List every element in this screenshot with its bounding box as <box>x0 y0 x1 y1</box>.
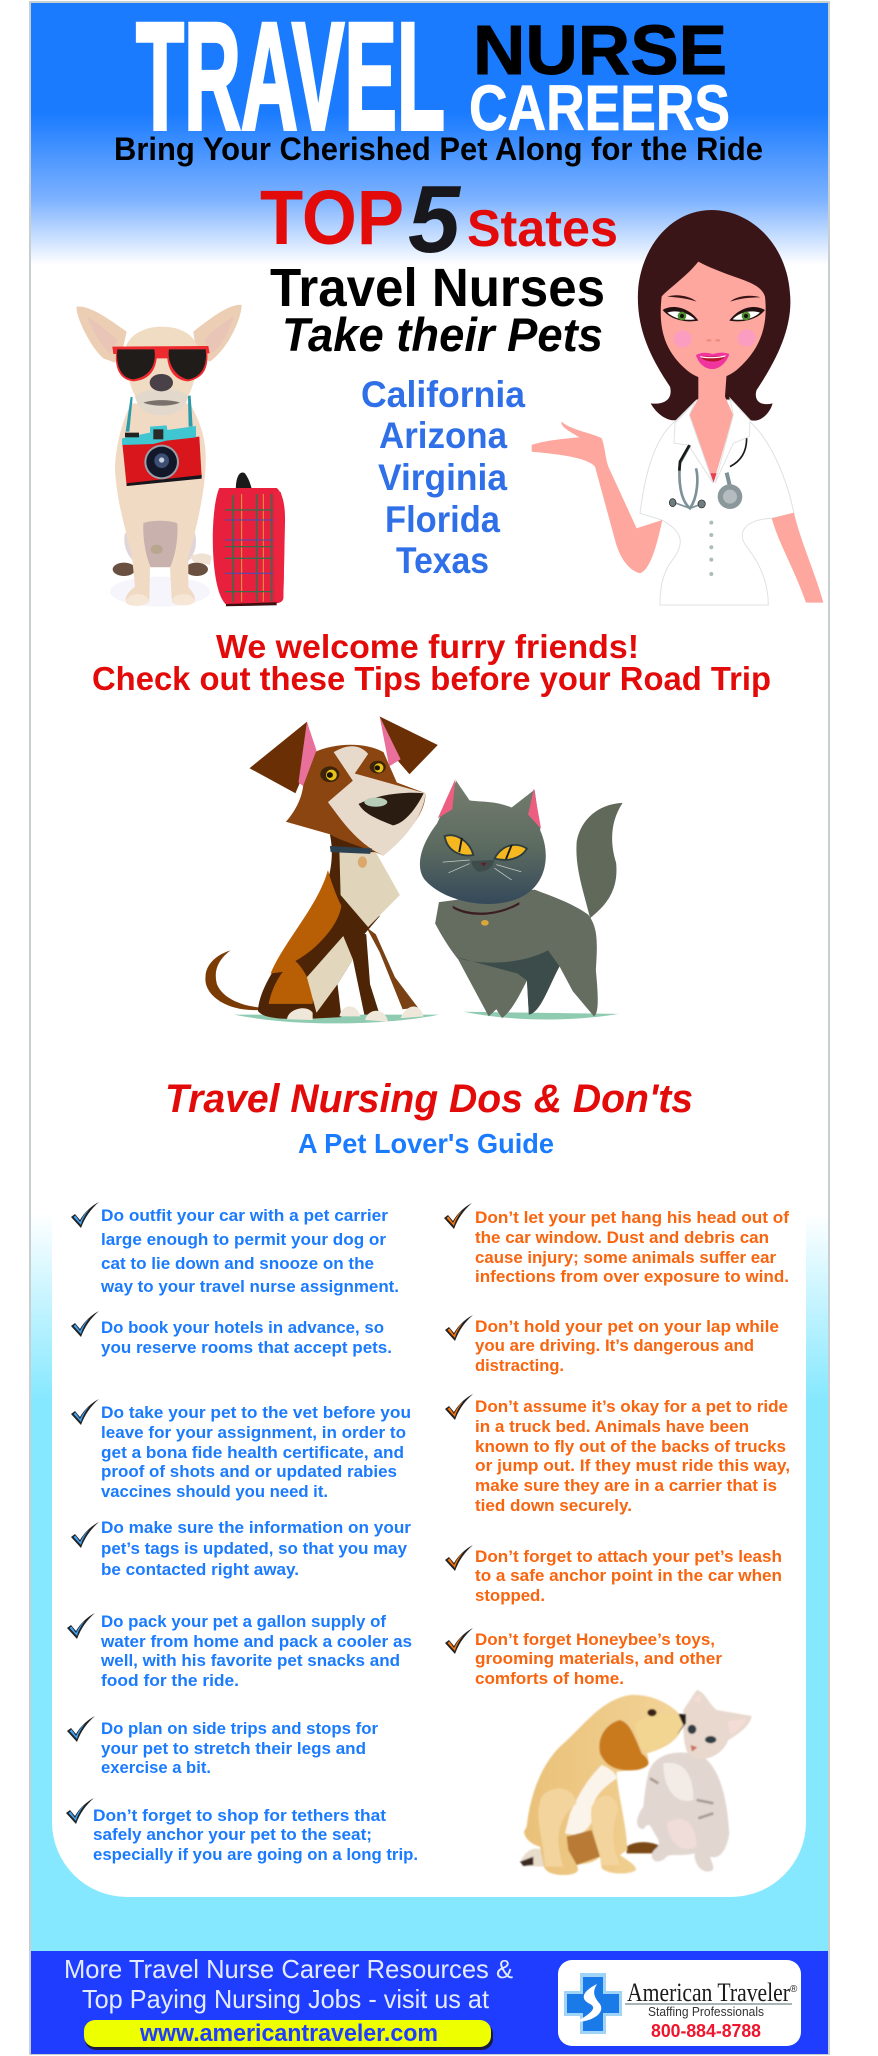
state: Florida: Florida <box>385 499 500 540</box>
illustration: chihuahua with sunglasses and camera <box>77 305 242 607</box>
don't tip 4: Don’t forget to attach your pet’s leash <box>475 1547 782 1566</box>
heading: top 5 states <box>260 166 618 273</box>
don't tip 3: Don’t assume it’s okay for a pet to ride <box>475 1397 788 1416</box>
don't tip 2: distracting. <box>475 1356 564 1375</box>
check icon <box>445 1315 473 1341</box>
do tip 6 <box>67 1716 378 1777</box>
column: don'ts <box>444 1203 790 1688</box>
don't tip 3 <box>445 1394 790 1515</box>
do tip 4: be contacted right away. <box>101 1560 299 1579</box>
don't tip 1: Don’t let your pet hang his head out of <box>475 1208 789 1227</box>
do tip 5: food for the ride. <box>101 1671 239 1690</box>
don't tip 5: grooming materials, and other <box>475 1649 722 1668</box>
don't tip 5 <box>445 1628 722 1688</box>
don't tip 5: comforts of home. <box>475 1669 624 1688</box>
don't tip 1: infections from over exposure to wind. <box>475 1267 789 1286</box>
logo tagline: Staffing Professionals <box>648 2004 764 2019</box>
do tip 1: way to your travel nurse assignment. <box>100 1277 399 1296</box>
nurse face <box>661 262 766 379</box>
don't tip 3: tied down securely. <box>475 1496 632 1515</box>
do tip 6: exercise a bit. <box>101 1758 211 1777</box>
do tip 2 <box>71 1311 392 1357</box>
don't tip 2: you are driving. It’s dangerous and <box>475 1336 754 1355</box>
nurse coat <box>640 400 794 605</box>
don't tip 1 <box>444 1203 789 1286</box>
check icon <box>71 1399 99 1425</box>
illustration: cartoon nurse <box>532 210 823 605</box>
website button <box>84 2020 493 2050</box>
check icon <box>67 1613 95 1639</box>
do tip 1: large enough to permit your dog or <box>101 1230 386 1249</box>
logo company name: American Traveler <box>627 1978 790 2007</box>
don't tip 2: Don’t hold your pet on your lap while <box>475 1317 779 1336</box>
do tip 4 <box>71 1518 411 1579</box>
word: TOP: TOP <box>260 175 404 261</box>
numeral: 5: 5 <box>408 166 462 273</box>
word: States: States <box>467 200 618 258</box>
column: dos <box>66 1202 418 1864</box>
do tip 3: get a bona fide health certificate, and <box>101 1443 404 1462</box>
nurse right arm <box>772 513 823 603</box>
do tip 5 <box>67 1612 412 1690</box>
section subheading: A Pet Lover's Guide <box>298 1128 554 1159</box>
don't tip 1: cause injury; some animals suffer ear <box>475 1248 776 1267</box>
check icon <box>67 1716 95 1742</box>
do tip 6: Do plan on side trips and stops for <box>101 1719 378 1738</box>
state: California: California <box>361 374 525 415</box>
don't tip 4: stopped. <box>475 1586 545 1605</box>
check icon <box>445 1394 473 1420</box>
don't tip 4 <box>445 1545 782 1605</box>
do tip 5: Do pack your pet a gallon supply of <box>101 1612 386 1631</box>
website button: www.americantraveler.com <box>139 2020 438 2047</box>
check icon <box>445 1628 473 1654</box>
don't tip 4: to a safe anchor point in the car when <box>475 1566 782 1585</box>
check icon <box>444 1203 472 1229</box>
footer bar <box>31 1951 828 2054</box>
do tip 7 <box>66 1798 418 1864</box>
nurse hair <box>638 210 790 421</box>
check icon <box>71 1202 99 1228</box>
do tip 5: water from home and pack a cooler as <box>100 1632 412 1651</box>
do tip 3: Do take your pet to the vet before you <box>101 1403 411 1422</box>
don't tip 3: in a truck bed. Animals have been <box>475 1417 749 1436</box>
check icon <box>66 1798 94 1824</box>
front leg far <box>366 927 418 1009</box>
stethoscope <box>669 438 747 509</box>
do tip 3: proof of shots and or updated rabies <box>101 1462 397 1481</box>
do tip 4: pet’s tags is updated, so that you may <box>101 1539 408 1558</box>
do tip 3: vaccines should you need it. <box>101 1482 328 1501</box>
check icon <box>71 1522 99 1548</box>
title <box>136 0 730 162</box>
list of five states <box>361 374 525 581</box>
do tip 7: safely anchor your pet to the seat; <box>93 1825 372 1844</box>
registered mark: ® <box>790 1984 798 1995</box>
do tip 1: cat to lie down and snooze on the <box>101 1254 374 1273</box>
do tip 2: you reserve rooms that accept pets. <box>101 1338 392 1357</box>
don't tip 3: make sure they are in a carrier that is <box>475 1476 777 1495</box>
don't tip 3: known to fly out of the backs of trucks <box>475 1437 786 1456</box>
title word: NURSE: NURSE <box>473 11 727 89</box>
nurse neck <box>689 373 733 483</box>
state: Texas: Texas <box>396 540 489 581</box>
don't tip 2 <box>445 1315 779 1375</box>
do tip 1 <box>71 1202 399 1296</box>
logo phone number: 800-884-8788 <box>651 2021 761 2041</box>
footer line one: More Travel Nurse Career Resources & <box>64 1954 513 1984</box>
state: Arizona: Arizona <box>379 415 507 456</box>
don't tip 5: Don’t forget Honeybee’s toys, <box>475 1630 715 1649</box>
photo: puppy kissing kitten <box>520 1690 752 1875</box>
do tip 6: your pet to stretch their legs and <box>101 1739 366 1758</box>
nurse collar <box>674 398 750 483</box>
do tip 4: Do make sure the information on your <box>101 1518 411 1537</box>
tagline line two: Check out these Tips before your Road Trip <box>92 660 771 697</box>
section heading: Travel Nursing Dos & Don'ts <box>165 1077 693 1121</box>
do tip 7: Don’t forget to shop for tethers that <box>93 1806 386 1825</box>
tagline line one: We welcome furry friends! <box>216 628 639 665</box>
do tip 3: leave for your assignment, in order to <box>101 1423 406 1442</box>
don't tip 3: or jump out. If they must ride this way, <box>475 1456 790 1475</box>
check icon <box>71 1311 99 1337</box>
nurse arm and hand <box>532 422 662 573</box>
do tip 7: especially if you are going on a long trip. <box>93 1845 418 1864</box>
heading: travel nurses: Travel Nurses <box>270 258 605 318</box>
do tip 2: Do book your hotels in advance, so <box>101 1318 384 1337</box>
heading: take their pets: Take their Pets <box>282 308 603 361</box>
coat buttons <box>709 521 713 576</box>
footer line two: Top Paying Nursing Jobs - visit us at <box>82 1984 490 2014</box>
torso <box>258 834 380 1019</box>
front leg near <box>343 931 380 1015</box>
red tagline <box>92 628 771 697</box>
subtitle: Bring Your Cherished Pet Along for the Ride <box>114 131 763 167</box>
do tip 3 <box>71 1399 411 1501</box>
state: Virginia: Virginia <box>378 457 507 498</box>
do tip 1: Do outfit your car with a pet carrier <box>101 1206 388 1225</box>
do tip 5: well, with his favorite pet snacks and <box>100 1651 400 1670</box>
illustration: cartoon cat <box>420 779 623 1020</box>
don't tip 1: the car window. Dust and debris can <box>475 1228 769 1247</box>
illustration: plaid suitcase <box>213 472 285 606</box>
logo cross icon <box>564 1973 622 2034</box>
illustration: cartoon dog <box>205 716 439 1023</box>
logo card <box>558 1960 801 2046</box>
check icon <box>445 1545 473 1571</box>
title word: CAREERS: CAREERS <box>469 72 730 144</box>
